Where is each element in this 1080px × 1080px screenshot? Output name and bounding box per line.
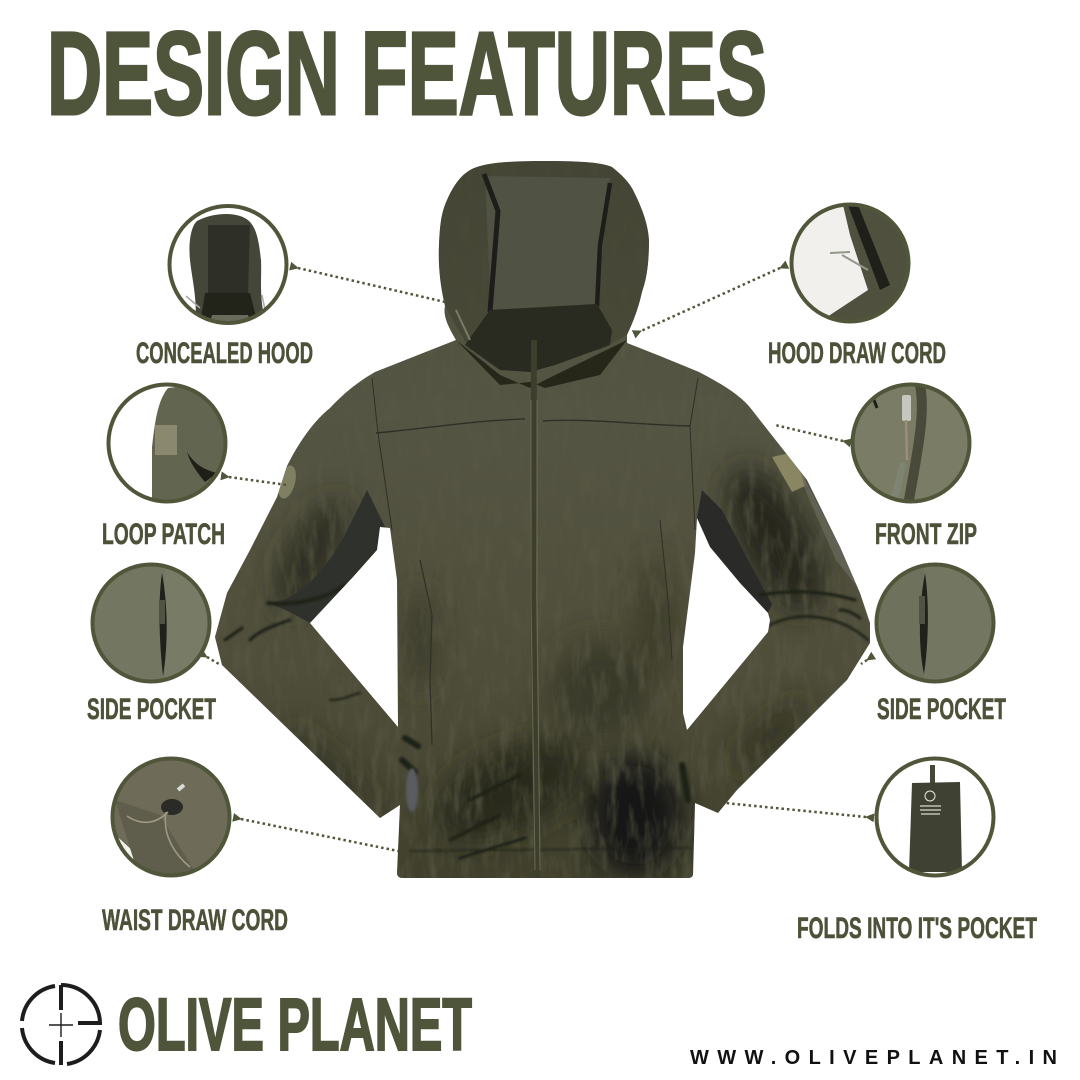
callout: waist draw cord <box>110 756 232 878</box>
brand name: OLIVE PLANET <box>118 983 472 1066</box>
arrow: folds into pocket <box>725 803 866 817</box>
callout: folds into pocket <box>876 758 994 876</box>
callout: front zip <box>852 384 970 505</box>
arrow: front zip <box>775 425 843 441</box>
callout: side pocket left <box>92 564 215 685</box>
left loop patch <box>278 466 296 498</box>
label: waist draw cord: WAIST DRAW CORD <box>102 904 288 937</box>
white gap left of body <box>310 527 398 727</box>
label: side pocket right: SIDE POCKET <box>877 693 1006 726</box>
front zip <box>533 340 537 880</box>
callout: hood draw cord <box>792 200 915 325</box>
label: front zip: FRONT ZIP <box>875 518 977 551</box>
jacket photo illustration <box>200 150 890 890</box>
label: concealed hood: CONCEALED HOOD <box>136 337 313 370</box>
callout: side pocket right <box>876 564 994 685</box>
website url: WWW.OLIVEPLANET.IN <box>690 1047 1057 1069</box>
white gap right of body <box>683 518 770 730</box>
arrow: hood draw cord <box>641 268 780 331</box>
arrow: concealed hood <box>298 268 445 302</box>
logo mark: crosshair <box>22 985 100 1065</box>
hood <box>439 161 649 388</box>
grey mesh hem <box>406 768 418 812</box>
label: loop patch: LOOP PATCH <box>102 518 225 551</box>
arrow: waist draw cord <box>241 819 398 851</box>
arrow: side pocket left <box>207 657 219 664</box>
sleeve lighter edge <box>800 472 858 588</box>
label: hood draw cord: HOOD DRAW CORD <box>768 337 946 370</box>
callout: loop patch <box>108 380 235 505</box>
yoke seams and wrinkles <box>372 378 698 745</box>
arrow: loop patch <box>229 477 287 485</box>
label: side pocket left: SIDE POCKET <box>87 693 216 726</box>
right loop patch <box>772 452 807 492</box>
underarm mesh panels <box>270 490 772 623</box>
arrow: side pocket right <box>861 660 867 664</box>
callout: concealed hood <box>170 206 286 330</box>
